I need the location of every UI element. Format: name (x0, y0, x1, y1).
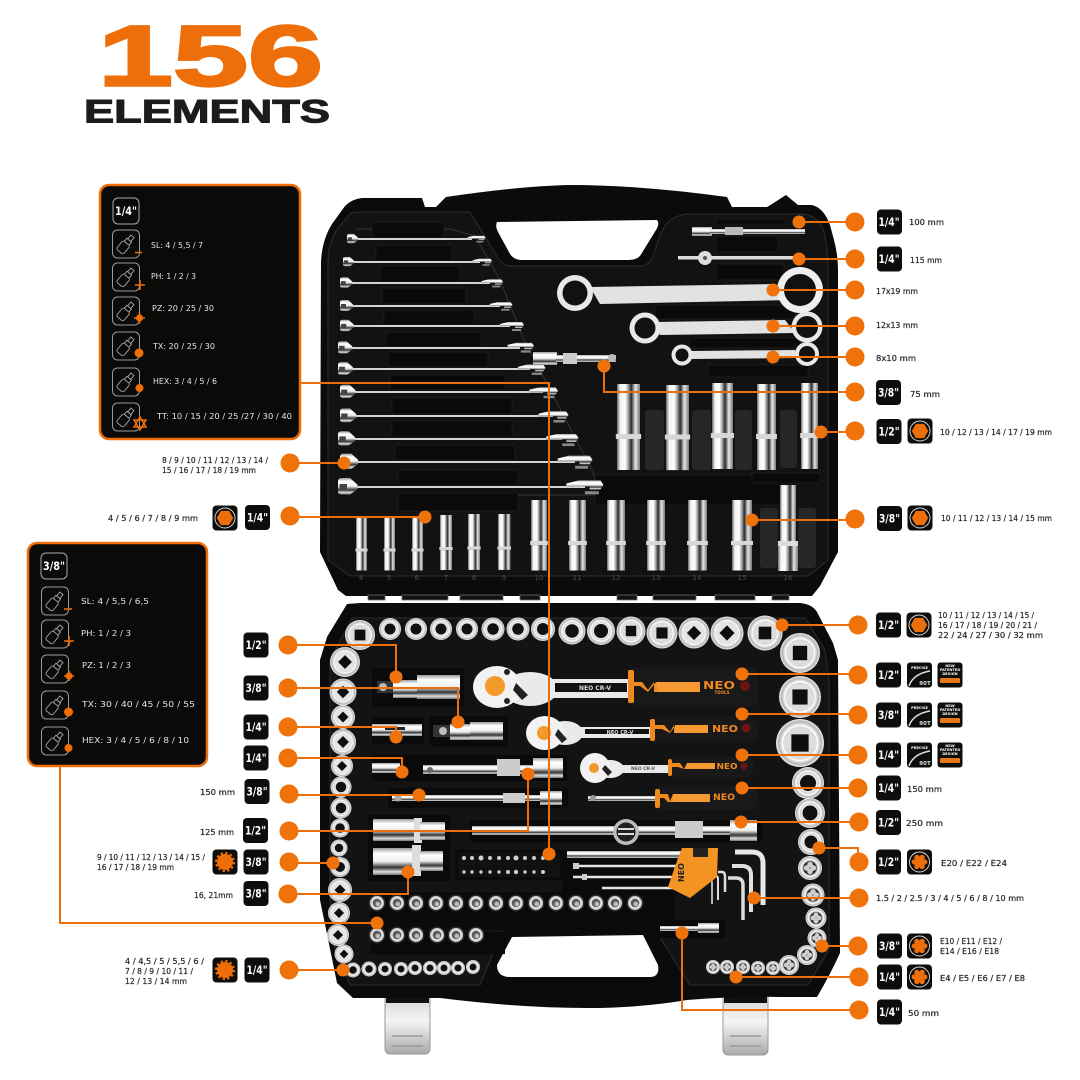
tray size numbers: 13 (652, 574, 660, 582)
callout: 1/2 deep sockets: 1/2" (878, 424, 900, 438)
callout: 1/4 ratchet: 90T (919, 761, 931, 767)
callout: left 3/8 joint: 3/8" (246, 681, 266, 695)
callout: 17x19 mm (766, 280, 918, 300)
badge: 1/4: 1/4" (115, 204, 137, 218)
callout: wrench sizes: 8 / 9 / 10 / 11 / 12 / 13 / 14 / (162, 455, 268, 465)
callout: 3/8 ratchet: PATENTED (940, 708, 960, 712)
callout: left 1/2 125 mm (200, 768, 534, 843)
callout: 1/4 50 mm: 1/4" (879, 1005, 900, 1019)
callout: left 1/2 joint (244, 632, 402, 684)
callout: 1/2 sockets: 16 / 17 / 18 / 19 / 20 / 21 / (938, 620, 1037, 630)
hex key set (567, 848, 763, 920)
callout: left 3/8 150 mm: 3/8" (246, 784, 268, 798)
callout: 12x13 mm: 12x13 mm (876, 320, 918, 330)
callout: 1/4 ratchet: 1/4" (878, 748, 899, 762)
callout: 1/4 150 mm (736, 776, 942, 800)
callout: 1/2 deep sockets: 10 / 12 / 13 / 14 / 17 / 19 mm (940, 427, 1052, 437)
callout: 1/2 250 mm (734, 810, 943, 835)
callout: left 1/4 star sockets (125, 956, 350, 986)
callout: 1/2 250 mm: 1/2" (878, 816, 899, 830)
callout: 1/2 ratchet (736, 662, 962, 688)
ratchet 3/8 (526, 716, 757, 750)
tray size numbers: 16 (784, 574, 793, 582)
badge: 1/4 (113, 198, 139, 224)
ratchet 1/2 (473, 666, 758, 708)
screwdriver bit rows (368, 894, 644, 944)
callout: 12x13 mm (766, 316, 918, 336)
callout: left 1/4 star sockets: 1/4" (246, 963, 268, 977)
callout: 1/2 torx: E20 / E22 / E24 (941, 858, 1007, 868)
bit holder (458, 853, 560, 877)
callout: wrench sizes (162, 454, 350, 475)
callout: 1/4 ratchet: DESIGN (942, 752, 958, 756)
screwdriver handle 1/4 (588, 787, 757, 810)
callout: 1/2 sockets: 10 / 11 / 12 / 13 / 14 / 15 / (938, 610, 1034, 620)
callout: 1/4 ratchet (736, 742, 962, 768)
callout: 1/4 deep sockets: 4 / 5 / 6 / 7 / 8 / 9 mm (108, 513, 198, 523)
ratchet 3/8: NEO (712, 724, 738, 735)
tray size numbers (359, 574, 793, 582)
callout: left 3/8 star sockets: 3/8" (246, 855, 266, 869)
universal joints and adapters (372, 675, 503, 773)
callout: 1/4 torx: E4 / E5 / E6 / E7 / E8 (940, 973, 1025, 983)
bit sizes 3/8: HEX: 3 / 4 / 5 / 6 / 8 / 10 (82, 735, 189, 745)
extension bars (392, 758, 757, 933)
title: 156 elements: ELEMENTS (84, 94, 330, 130)
tray size numbers: 11 (573, 574, 581, 582)
screwdriver handle 1/4: NEO (713, 793, 735, 803)
callout: 1/2 ratchet: PATENTED (940, 668, 960, 672)
callout: 1/4 ratchet: NEW (945, 744, 955, 748)
callout: 1/2 sockets: 1/2" (878, 618, 899, 632)
combination wrenches (338, 234, 604, 494)
badge: 3/8: 3/8" (43, 559, 65, 573)
bit sizes 1/4: HEX: 3 / 4 / 5 / 6 (153, 376, 217, 386)
bit sizes 3/8: PH: 1 / 2 / 3 (81, 628, 131, 638)
open case: lower tray (320, 603, 840, 1008)
tray size numbers: 6 (415, 574, 420, 582)
callout: 3/8 ratchet: PRECISE (911, 706, 928, 710)
connector: panel 3/8 to bit row (60, 766, 384, 930)
callout: 1/2 ratchet: NEW (945, 664, 955, 668)
callout: 1/2 torx (812, 842, 1007, 874)
badge: 3/8 (41, 553, 67, 579)
callout: left 3/8 16, 21 mm (194, 866, 414, 906)
callout: left 3/8 16, 21 mm: 16, 21mm (194, 890, 233, 900)
callout: 8x10 mm (766, 348, 916, 366)
callout: left 3/8 16, 21 mm: 3/8" (246, 886, 266, 900)
callout: left 1/2 125 mm: 125 mm (200, 827, 234, 837)
tray size numbers: 14 (693, 574, 702, 582)
callout: left 3/8 star sockets: 16 / 17 / 18 / 19 mm (97, 862, 174, 872)
callout: 1/2 ratchet: PRECISE (911, 666, 928, 670)
callout: left 1/2 joint: 1/2" (246, 638, 266, 652)
callout: 1/4 deep sockets: 1/4" (247, 510, 268, 524)
upper extensions (533, 227, 805, 365)
tray size numbers: 4 (359, 574, 364, 582)
tray size numbers: 8 (472, 574, 476, 582)
callout: left 3/8 star sockets (97, 850, 340, 874)
hex key set: NEO (677, 863, 686, 882)
callout: 3/8 ratchet: 90T (919, 721, 931, 727)
callout: left 3/8 star sockets: 9 / 10 / 11 / 12 / 13 / 14 / 15 / (97, 852, 205, 862)
tray size numbers: 5 (387, 574, 391, 582)
bit sizes 1/4 (151, 240, 292, 421)
callout: 1/4 50 mm (676, 926, 939, 1024)
callout: 1/2 torx: 1/2" (878, 855, 899, 869)
ratchet 1/2: TOOLS (715, 690, 730, 695)
callout: 1/4 150 mm: 150 mm (907, 784, 942, 794)
callout: left 1/4 star sockets: 12 / 13 / 14 mm (125, 976, 187, 986)
ratchet 1/4 (580, 753, 753, 783)
callout: left 1/4 star sockets: 7 / 8 / 9 / 10 / 11 / (125, 966, 193, 976)
callout: hex keys: 1.5 / 2 / 2.5 / 3 / 4 / 5 / 6 / 8 / 10 mm (876, 893, 1024, 903)
callout: 1/4 100 mm (792, 210, 944, 234)
ratchet 1/4: NEO CR-V (631, 766, 656, 772)
bit sizes 3/8: PZ: 1 / 2 / 3 (82, 660, 131, 670)
callout: 3/8 ratchet: NEW (945, 704, 955, 708)
callout: wrench sizes: 15 / 16 / 17 / 18 / 19 mm (162, 465, 256, 475)
icon row bits 1/4 (112, 230, 146, 431)
panel: 1/4 inch bits (100, 185, 300, 439)
bit sizes 1/4: TT: 10 / 15 / 20 / 25 /27 / 30 / 40 (156, 411, 292, 421)
callout: left 3/8 150 mm: 150 mm (200, 787, 235, 797)
callout: 1/2 250 mm: 250 mm (906, 818, 943, 828)
bit sizes 3/8 (81, 596, 195, 745)
connector: panel 1/4 to bit holder (300, 383, 556, 860)
callout: 3/8 75 mm: 75 mm (910, 389, 940, 399)
callout: 1/2 ratchet: 90T (919, 681, 931, 687)
tool wells (368, 668, 762, 954)
tray size numbers: 9 (502, 574, 506, 582)
bit sizes 3/8: SL: 4 / 5,5 / 6,5 (81, 596, 149, 606)
clasps (385, 985, 768, 1055)
hinges (368, 595, 789, 600)
panel: 3/8 inch bits (28, 543, 207, 766)
callout: 1/4 115 mm (792, 246, 942, 272)
callout: hex keys (748, 888, 1024, 908)
callout: left 1/4 adapter: 1/4" (246, 751, 266, 765)
open case: upper lid tray (320, 185, 838, 600)
callout: left 1/4 joint (244, 714, 402, 744)
callout: 3/8 deep sockets (746, 506, 1052, 531)
bit sizes 1/4: SL: 4 / 5,5 / 7 (151, 240, 203, 250)
tray size numbers: 10 (535, 574, 543, 582)
callout: 1/2 ratchet: DESIGN (942, 672, 958, 676)
callout: 3/8 torx (816, 934, 1002, 958)
callout: 1/2 ratchet: 1/2" (878, 668, 899, 682)
ring spanners (557, 267, 823, 366)
callout: 1/4 100 mm: 1/4" (878, 215, 900, 229)
callout: left 1/4 adapter (244, 746, 408, 778)
sockets: perimeter (327, 616, 826, 978)
callout: left 1/4 star sockets: 4 / 4,5 / 5 / 5,5 / 6 / (125, 956, 204, 966)
callout: 1/4 100 mm: 100 mm (909, 217, 944, 227)
callout: 1/4 50 mm: 50 mm (908, 1008, 939, 1018)
callout: 1/4 ratchet: PRECISE (911, 746, 928, 750)
callout: 3/8 torx: E14 / E16 / E18 (940, 946, 999, 956)
ratchet 1/4: NEO (716, 762, 738, 771)
title: 156 elements: 156 (98, 8, 323, 104)
callout: 1/4 torx (730, 964, 1025, 990)
callout: 1/2 sockets (776, 610, 1043, 640)
bit sizes 1/4: PZ: 20 / 25 / 30 (152, 303, 214, 313)
callout: 17x19 mm: 17x19 mm (876, 286, 918, 296)
callout: 1/4 torx: 1/4" (879, 970, 900, 984)
tray size numbers: 12 (612, 574, 620, 582)
ratchet 1/2: NEO (703, 679, 735, 692)
callout: 3/8 ratchet (736, 702, 962, 728)
callout: 1/4 115 mm: 1/4" (878, 252, 900, 266)
ratchet 1/2: NEO CR-V (579, 685, 611, 692)
callout: 1/4 115 mm: 115 mm (910, 255, 942, 265)
callout: 3/8 ratchet: 3/8" (878, 708, 899, 722)
callout: 3/8 75 mm: 3/8" (878, 386, 899, 400)
tray size numbers: 15 (738, 574, 746, 582)
callout: 3/8 ratchet: DESIGN (942, 712, 958, 716)
callout: left 1/4 joint: 1/4" (246, 720, 266, 734)
callout: 3/8 75 mm (598, 360, 940, 405)
callout: 1/4 deep sockets (108, 505, 432, 530)
callout: left 3/8 150 mm (200, 779, 426, 804)
tray size numbers: 7 (444, 574, 448, 582)
callout: 3/8 deep sockets: 10 / 11 / 12 / 13 / 14 / 15 mm (941, 513, 1052, 523)
large 3/8 sockets (373, 818, 445, 876)
ratchet 3/8: NEO CR-V (607, 730, 633, 736)
callout: 1/4 150 mm: 1/4" (878, 781, 899, 795)
callout: 8x10 mm: 8x10 mm (876, 353, 916, 363)
tray wells (372, 219, 820, 511)
callout: 1/2 sockets: 22 / 24 / 27 / 30 / 32 mm (938, 630, 1043, 640)
bit sizes 1/4: TX: 20 / 25 / 30 (152, 341, 215, 351)
callout: 3/8 deep sockets: 3/8" (879, 512, 900, 526)
callout: 1/2 deep sockets (814, 418, 1052, 444)
deep sockets: upper rows (355, 383, 819, 571)
icon row bits 3/8 (42, 587, 74, 755)
bit sizes 3/8: TX: 30 / 40 / 45 / 50 / 55 (81, 699, 195, 709)
bit sizes 1/4: PH: 1 / 2 / 3 (151, 271, 196, 281)
title: 156 elements (84, 8, 330, 130)
callout: 3/8 torx: 3/8" (879, 939, 900, 953)
callout: 1/4 ratchet: PATENTED (940, 748, 960, 752)
callout: 3/8 torx: E10 / E11 / E12 / (940, 936, 1002, 946)
callout: left 3/8 joint (244, 676, 464, 728)
callout: left 1/2 125 mm: 1/2" (245, 824, 266, 838)
